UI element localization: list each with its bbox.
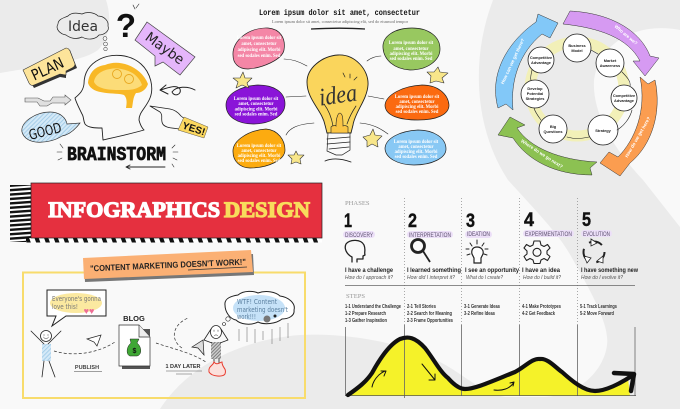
- comic heading: [83, 250, 254, 282]
- bubble: blue: Lorem ipsum dolor sit: [394, 140, 439, 145]
- arrow: where do we go next: [498, 117, 597, 175]
- phase 4: I have an idea: [522, 267, 560, 274]
- bubble: amber: Lorem ipsum dolor sit: [237, 144, 282, 149]
- dashed path down: [156, 318, 206, 362]
- node: market awareness: [596, 49, 624, 77]
- node: business model: Business: [568, 43, 586, 48]
- bubble: pink: sed sodales enim. Sed: [238, 54, 281, 59]
- node: competitive advantage right: [611, 85, 637, 111]
- panel: idea bulb: [226, 9, 449, 168]
- phase 3: What do I create?: [466, 275, 503, 281]
- node: competitive advantage left: Advantage: [531, 60, 552, 65]
- arrow: who are we: Who are we?: [614, 24, 639, 46]
- sparks near question mark: [133, 4, 139, 9]
- angry thought cloud: work!!!: [237, 313, 256, 321]
- phase 5: How do I evolve it?: [581, 275, 623, 281]
- node: competitive advantage right: Competitive: [613, 93, 636, 98]
- bubble: amber: amet, consectetur: [241, 149, 277, 154]
- grey arrow: [25, 95, 71, 106]
- node connectors: [531, 50, 632, 138]
- banner accent word: DESIGN: [224, 197, 310, 222]
- steps column 3: 3-2 Refine Ideas: [464, 311, 495, 317]
- bubble: orange: Lorem ipsum dolor sit: [395, 95, 440, 100]
- node: big questions: Big: [550, 124, 557, 129]
- blog document: BLOG: [123, 314, 145, 323]
- comic frame: [23, 272, 305, 398]
- bubble: green: sed sodales enim. Sed: [390, 57, 433, 62]
- divider: [345, 284, 635, 286]
- panel: design thinking phases: [343, 198, 639, 398]
- header: Lorem ipsum dolor sit amet, consectetur: [259, 9, 420, 18]
- steps column 4: 4-2 Get Feedback: [522, 311, 556, 317]
- node: market awareness: Market: [604, 58, 617, 63]
- steps column 2: 2-2 Search for Meaning: [407, 311, 452, 317]
- column dividers: [404, 198, 578, 325]
- highlights: [343, 230, 612, 238]
- bubble: orange: amet, consectetur: [399, 100, 435, 105]
- phase 2: [407, 211, 461, 281]
- bubble: green: adipiscing elit. Morbi: [390, 52, 433, 57]
- one day later label: 1 DAY LATER: [165, 364, 201, 370]
- steps column 1: 1-1 Understand the Challenge: [345, 304, 402, 310]
- node: develop potential strategies: Potential: [527, 91, 543, 96]
- bubble: amber: sed sodales enim. Sed: [238, 159, 281, 164]
- rain lines: [239, 323, 288, 344]
- node: competitive advantage left: Competitive: [530, 55, 553, 60]
- header: Lorem ipsum dolor sit amet, consectetur adipiscing elit, sed do eiusmod tempor: [272, 20, 409, 25]
- phase 2: 2: [408, 211, 417, 232]
- bubble: blue: [385, 130, 446, 165]
- node: competitive advantage right: Advantage: [614, 98, 635, 103]
- phase 5: 5: [582, 210, 591, 231]
- phase 4: 4: [524, 210, 534, 231]
- sad stick figure: [204, 326, 228, 368]
- bubble: purple: [226, 85, 285, 124]
- angry thought cloud: marketing doesn't: [237, 306, 288, 314]
- bubble: blue: adipiscing elit. Morbi: [395, 150, 438, 155]
- node: big questions: [539, 115, 567, 143]
- plan bubble: PLAN: [28, 54, 67, 84]
- speech bubble: [47, 290, 106, 326]
- node: develop potential strategies: [521, 80, 549, 108]
- light bulb: idea: [317, 79, 359, 112]
- steps column 5: 5-1 Track Learnings: [580, 304, 617, 310]
- panel: strategy cycle: [496, 11, 659, 176]
- flames: [209, 362, 225, 376]
- one day later label: [165, 364, 202, 374]
- phase 2: How did I interpret it?: [407, 275, 455, 281]
- stars: [233, 67, 448, 164]
- bubble: amber: adipiscing elit. Morbi: [238, 154, 281, 159]
- bubble: blue: amet, consectetur: [398, 145, 434, 150]
- arrow: how do we get here: How do we get here?: [624, 116, 651, 158]
- panel: content marketing comic: [23, 250, 305, 398]
- pointing hand: [150, 106, 186, 129]
- node: market awareness: Awareness: [600, 63, 620, 68]
- inner ring: [530, 42, 624, 136]
- phase 3: [465, 211, 519, 281]
- node: business model: Model: [571, 48, 583, 53]
- speech bubble: ♥♥: [84, 306, 94, 316]
- phase 2: INTERPRETATION: [409, 232, 451, 239]
- phase 2: I learned something: [407, 267, 461, 274]
- speech bubble: Everyone's gonna: [52, 295, 101, 303]
- angry thought cloud: [222, 291, 294, 326]
- node: develop potential strategies: Strategies: [526, 96, 544, 101]
- bubble: pink: adipiscing elit. Morbi: [238, 48, 281, 53]
- phase 4: How do I build it?: [523, 275, 561, 281]
- brain head outline: [75, 55, 152, 140]
- steps column 2: 2-1 Tell Stories: [407, 304, 436, 310]
- sparks beside title: [57, 144, 178, 167]
- node: competitive advantage left: [528, 47, 554, 73]
- phase 5: [581, 210, 639, 281]
- phase 4: EXPERIMENTATION: [525, 231, 572, 238]
- arrow: how can we get there: [496, 14, 558, 110]
- bubble: purple: amet, consectetur: [238, 102, 274, 107]
- publish label: PUBLISH: [75, 365, 99, 371]
- light bulb: [307, 55, 368, 162]
- bubble: pink: [233, 28, 284, 69]
- phase 1: DISCOVERY: [345, 232, 373, 239]
- phase 4: [522, 210, 572, 281]
- dashed path publish: [54, 342, 115, 354]
- comic heading: "CONTENT MARKETING DOESN'T WORK!": [90, 257, 246, 273]
- bubble: purple: sed sodales enim. Sed: [235, 112, 278, 118]
- phase 1: I have a challenge: [345, 267, 393, 274]
- good bubble: GOOD: [27, 120, 63, 144]
- phase 3: IDEATION: [467, 231, 490, 238]
- maybe bubble: [135, 22, 195, 75]
- plan bubble: [23, 48, 77, 88]
- steps column 3: 3-1 Generate Ideas: [464, 304, 500, 310]
- header: [259, 9, 420, 29]
- bubble: amber: [233, 129, 285, 168]
- bubble: purple: adipiscing elit. Morbi: [235, 108, 278, 112]
- brainstorm title: BRAINSTORM: [67, 144, 166, 166]
- happy stick figure: [31, 330, 61, 377]
- falling plane: [192, 340, 204, 355]
- arrow: where do we go next: Where do we go next?: [520, 138, 564, 169]
- steps column 4: 4-1 Make Prototypes: [522, 304, 561, 310]
- bubble: orange: adipiscing elit. Morbi: [396, 105, 439, 110]
- steps label: STEPS: [346, 293, 365, 300]
- yes tag: YES!: [181, 121, 206, 138]
- bubble: green: [383, 28, 440, 70]
- node: business model: [563, 34, 591, 62]
- connectors: [284, 56, 388, 135]
- speech bubble: love this!: [52, 303, 78, 311]
- arrow: who are we: [563, 11, 659, 76]
- steps column 5: 5-2 Move Forward: [580, 311, 614, 317]
- blog document: [119, 314, 150, 369]
- phase 3: I see an opportunity: [465, 267, 519, 274]
- node: big questions: Questions: [543, 129, 563, 134]
- bubble: pink: Lorem ipsum dolor sit: [237, 36, 282, 41]
- idea thought cloud: Idea: [68, 19, 98, 35]
- blog document: $: [133, 348, 137, 355]
- arrow: how do we get here: [600, 77, 657, 176]
- phase 1: 1: [344, 211, 352, 232]
- paper plane: [87, 335, 101, 346]
- bubble: green: Lorem ipsum dolor sit: [389, 41, 434, 46]
- squiggle arrow: [160, 85, 195, 95]
- steps column 2: 2-3 Frame Opportunities: [407, 318, 453, 324]
- phases label: PHASES: [345, 200, 370, 207]
- bubble: blue: sed sodales enim. Sed: [395, 155, 438, 160]
- arrow under title: [126, 165, 165, 169]
- bubble: green: amet, consectetur: [393, 47, 429, 52]
- node: develop potential strategies: Develop: [527, 86, 543, 91]
- banner: [10, 183, 322, 242]
- arrow: how can we get there: How can we get there?: [500, 38, 526, 85]
- bubble: pink: amet, consectetur: [241, 42, 277, 47]
- node: strategy: Strategy: [595, 128, 612, 133]
- node: strategy: [588, 115, 618, 145]
- bubble: orange: [385, 85, 449, 120]
- banner title: INFOGRAPHICS: [48, 197, 220, 222]
- steps column 1: 1-2 Prepare Research: [345, 311, 386, 317]
- question mark: ?: [116, 7, 136, 44]
- journey curve chart: [345, 325, 636, 398]
- steps column 1: 1-3 Gather Inspiration: [345, 318, 387, 324]
- bubble: orange: sed sodales enim. Sed: [396, 110, 439, 115]
- phase 1: How do I approach it?: [345, 275, 393, 281]
- phase 1: [344, 211, 393, 281]
- phase 3: 3: [466, 211, 475, 232]
- phase 5: I have something new: [581, 267, 639, 274]
- idea thought cloud: [57, 13, 108, 51]
- good bubble: [22, 112, 80, 144]
- panel: brainstorm: [22, 4, 208, 169]
- angry thought cloud: WTF! Content: [237, 298, 277, 306]
- maybe bubble: Maybe: [142, 29, 187, 68]
- phase 5: EVOLUTION: [583, 231, 610, 238]
- bubble: purple: Lorem ipsum dolor sit: [234, 97, 279, 102]
